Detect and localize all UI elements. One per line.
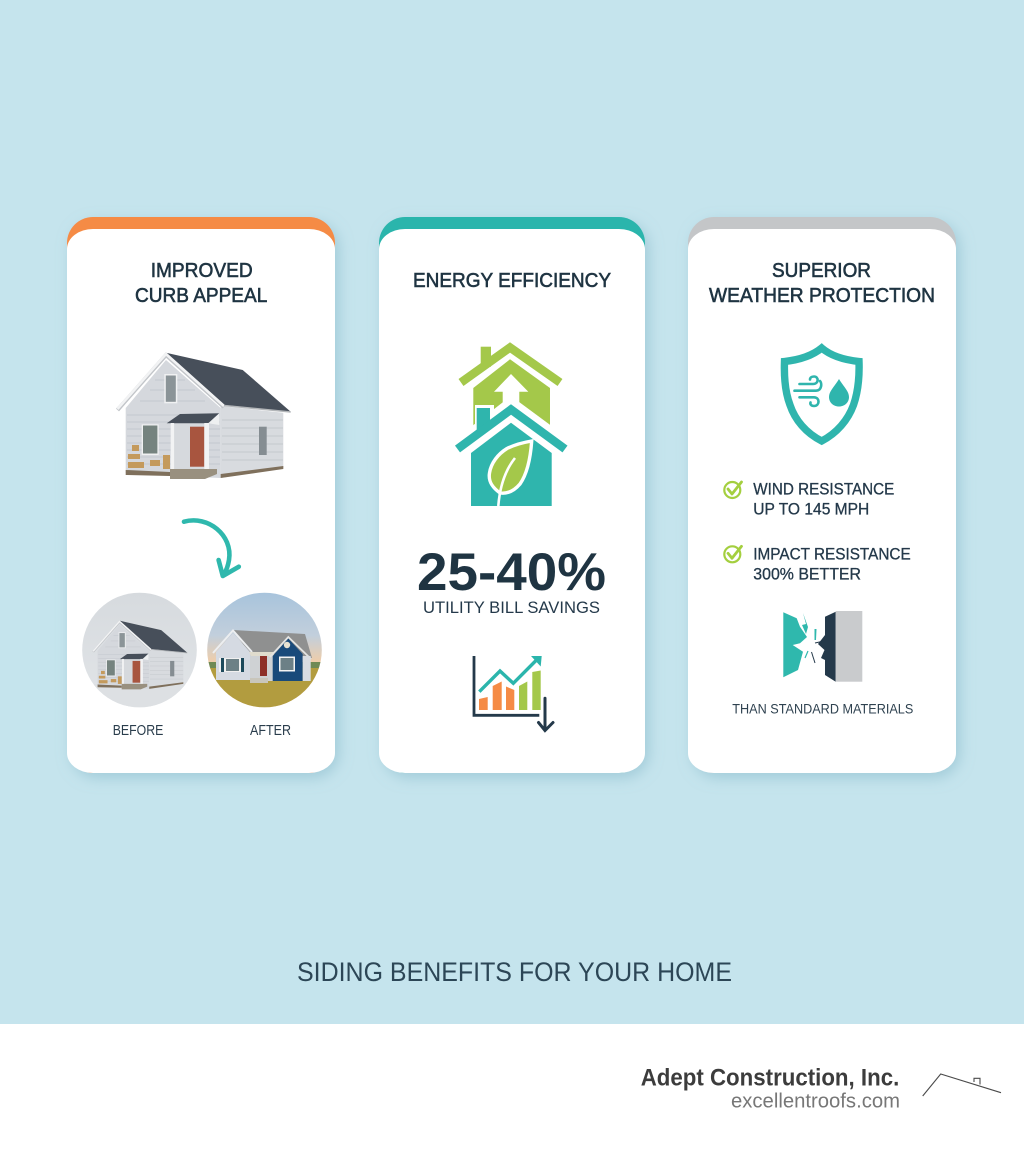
icon: green and teal houses with leaf — [445, 347, 580, 506]
text: impact resistance — [753, 545, 911, 583]
panel: energy efficiency — [379, 217, 645, 773]
panel: superior weather protection — [688, 217, 956, 773]
heading: superior weather protection: SUPERIOR — [772, 259, 871, 282]
logo: roof outline — [923, 1074, 1001, 1096]
panel: improved curb appeal — [67, 217, 335, 773]
heading: energy efficiency: ENERGY EFFICIENCY — [413, 269, 611, 292]
icon: shield with wind and water drop — [784, 348, 859, 441]
up arrow — [494, 374, 528, 428]
heading: superior weather protection — [709, 259, 935, 307]
heading: improved curb appeal: IMPROVED — [151, 259, 253, 282]
statistic: 25-40%: 25-40% — [417, 543, 606, 602]
card shadow and accent: gray — [688, 217, 956, 773]
heading: improved curb appeal: CURB APPEAL — [135, 284, 267, 307]
check item: impact resistance — [724, 545, 911, 583]
card shadow and accent: teal — [379, 217, 645, 773]
icon: impact on siding — [783, 611, 862, 682]
footer band — [0, 1024, 1024, 1154]
label: before: BEFORE — [113, 723, 164, 739]
icon: check — [724, 482, 742, 498]
text: impact resistance: IMPACT RESISTANCE — [753, 545, 911, 563]
card body — [67, 229, 335, 773]
check item: wind resistance — [724, 480, 894, 518]
text: wind resistance: WIND RESISTANCE — [753, 480, 894, 498]
text: impact resistance: 300% BETTER — [753, 565, 861, 583]
icon: savings chart — [474, 656, 553, 730]
teal house — [445, 396, 580, 506]
house illustration: worn siding — [118, 353, 291, 479]
before photo — [80, 590, 200, 710]
green house — [461, 347, 560, 428]
icon: check — [724, 546, 742, 562]
company name: Adept Construction, Inc. — [641, 1064, 899, 1092]
heading: improved curb appeal — [135, 259, 267, 307]
card body — [688, 229, 956, 773]
caption: than standard materials: THAN STANDARD MATERIALS — [732, 701, 913, 716]
text: wind resistance — [753, 480, 894, 518]
heading: superior weather protection: WEATHER PROTECTION — [709, 284, 935, 307]
text: wind resistance: UP TO 145 MPH — [753, 500, 869, 518]
card shadow and accent: orange — [67, 217, 335, 773]
arrow: before to after — [184, 520, 239, 576]
after photo — [205, 590, 325, 711]
card body — [379, 229, 645, 773]
label: after: AFTER — [250, 723, 291, 739]
title: SIDING BENEFITS FOR YOUR HOME — [297, 957, 732, 987]
website: excellentroofs.com — [731, 1090, 900, 1112]
caption: utility bill savings: UTILITY BILL SAVINGS — [423, 599, 600, 617]
leaf — [489, 441, 532, 506]
